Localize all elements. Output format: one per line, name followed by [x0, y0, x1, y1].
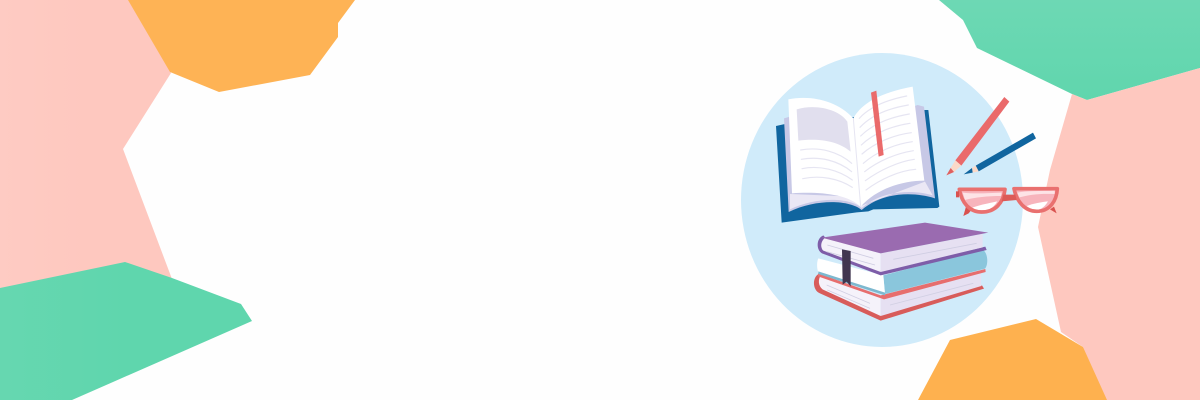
bookmark ribbon [871, 91, 884, 157]
icon: glasses [956, 189, 1057, 216]
panel: left pink shape [0, 0, 172, 300]
panel: right pink shape [1038, 68, 1200, 400]
icon: book stack [814, 223, 988, 321]
icon: red pencil [946, 97, 1009, 175]
red book [814, 274, 984, 321]
panel: light blue circle [741, 53, 1023, 347]
panel: left green shape [0, 262, 252, 400]
dark ribbon bookmark [842, 249, 851, 287]
panel: top orange shape [128, 0, 355, 92]
panel: right top green shape [939, 0, 1200, 100]
icon: open book [776, 87, 939, 223]
icon: blue pencil [964, 133, 1036, 174]
blue book [883, 249, 987, 294]
panel: bottom orange shape [918, 319, 1107, 400]
purple book [818, 235, 987, 275]
